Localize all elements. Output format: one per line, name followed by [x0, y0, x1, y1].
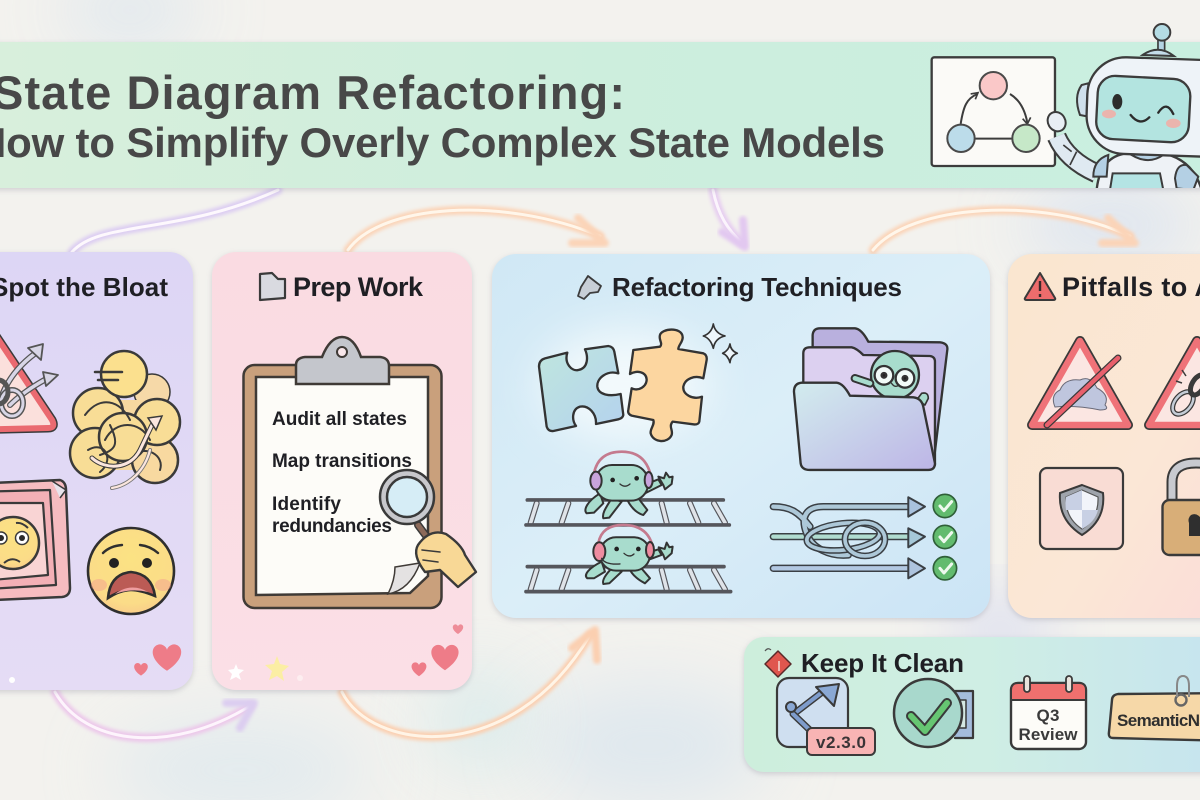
title banner: How to Simplify Overly Complex State Models	[0, 119, 885, 166]
icon: no-cloud warning triangle	[1032, 341, 1128, 425]
heading: Prep Work: Prep Work	[293, 272, 424, 302]
arrow: Prep Work to Refactoring	[348, 210, 605, 250]
icon: magnifier and hand	[380, 470, 476, 587]
icon: calendar Q3 Review: Q3	[1036, 706, 1060, 725]
icon: calendar Q3 Review: Review	[1018, 725, 1078, 744]
sparkles and hearts decoration	[228, 624, 463, 681]
robot mascot	[1044, 24, 1200, 190]
icon: shield card	[1040, 468, 1123, 549]
arrow: into Spot the Bloat top	[72, 190, 278, 252]
train tracks with running robots	[526, 452, 731, 592]
icon: warning sign	[1025, 273, 1055, 300]
icon: version tile	[777, 678, 875, 755]
arrow: Prep Work to Refactoring bottom	[342, 630, 597, 737]
icon: tangled yellow knot	[70, 351, 180, 488]
hearts decoration	[9, 644, 181, 683]
checklist text: Audit all states	[272, 409, 407, 430]
clipboard checklist: Identify	[272, 494, 341, 515]
version badge	[807, 728, 875, 755]
heading: Refactoring Techniques: Refactoring Techniques	[612, 272, 902, 302]
panel: Spot the Bloat	[0, 252, 193, 690]
icon: padlock	[1162, 463, 1200, 555]
clipboard checklist: redundancies	[272, 516, 392, 537]
arrow: Refactoring to Pitfalls	[873, 210, 1135, 250]
icon: version tile: v2.3.0	[816, 733, 866, 752]
flow arrows between stages	[55, 190, 1135, 738]
icon: mug with check	[894, 679, 973, 747]
icon: warning triangle with tangled arrows	[0, 336, 58, 430]
icon: document	[260, 273, 285, 300]
icon: SemanticNaming tag	[1109, 676, 1200, 741]
clipboard checklist: Map transitions	[272, 451, 412, 472]
panel: Keep It Clean	[744, 637, 1200, 772]
folder with peeking robot	[794, 328, 947, 470]
clipboard checklist	[244, 337, 442, 608]
icon: scared face emoji	[88, 528, 174, 614]
title banner	[0, 24, 1200, 190]
puzzle pieces with sparkles	[539, 324, 737, 441]
icon: broken chain warning triangle	[1149, 341, 1200, 425]
icon: git tag diamond	[765, 649, 791, 677]
icon: wrench	[578, 276, 601, 299]
untangled arrows with green checks	[773, 497, 925, 578]
state diagram card	[932, 57, 1055, 166]
arrow: Spot the Bloat to Prep Work	[55, 692, 254, 738]
panel: Prep Work	[212, 252, 476, 690]
icon: nested frame with worried face	[0, 480, 70, 601]
icon: calendar Q3 Review	[1011, 676, 1086, 749]
arrow: banner down to Refactoring	[713, 190, 745, 247]
heading: Keep It Clean: Keep It Clean	[801, 648, 964, 678]
panel: Pitfalls to Avoid	[1008, 254, 1200, 618]
panel: Refactoring Techniques	[492, 254, 990, 618]
green check badges	[933, 494, 957, 580]
title text: State Diagram Refactoring:	[0, 66, 625, 119]
